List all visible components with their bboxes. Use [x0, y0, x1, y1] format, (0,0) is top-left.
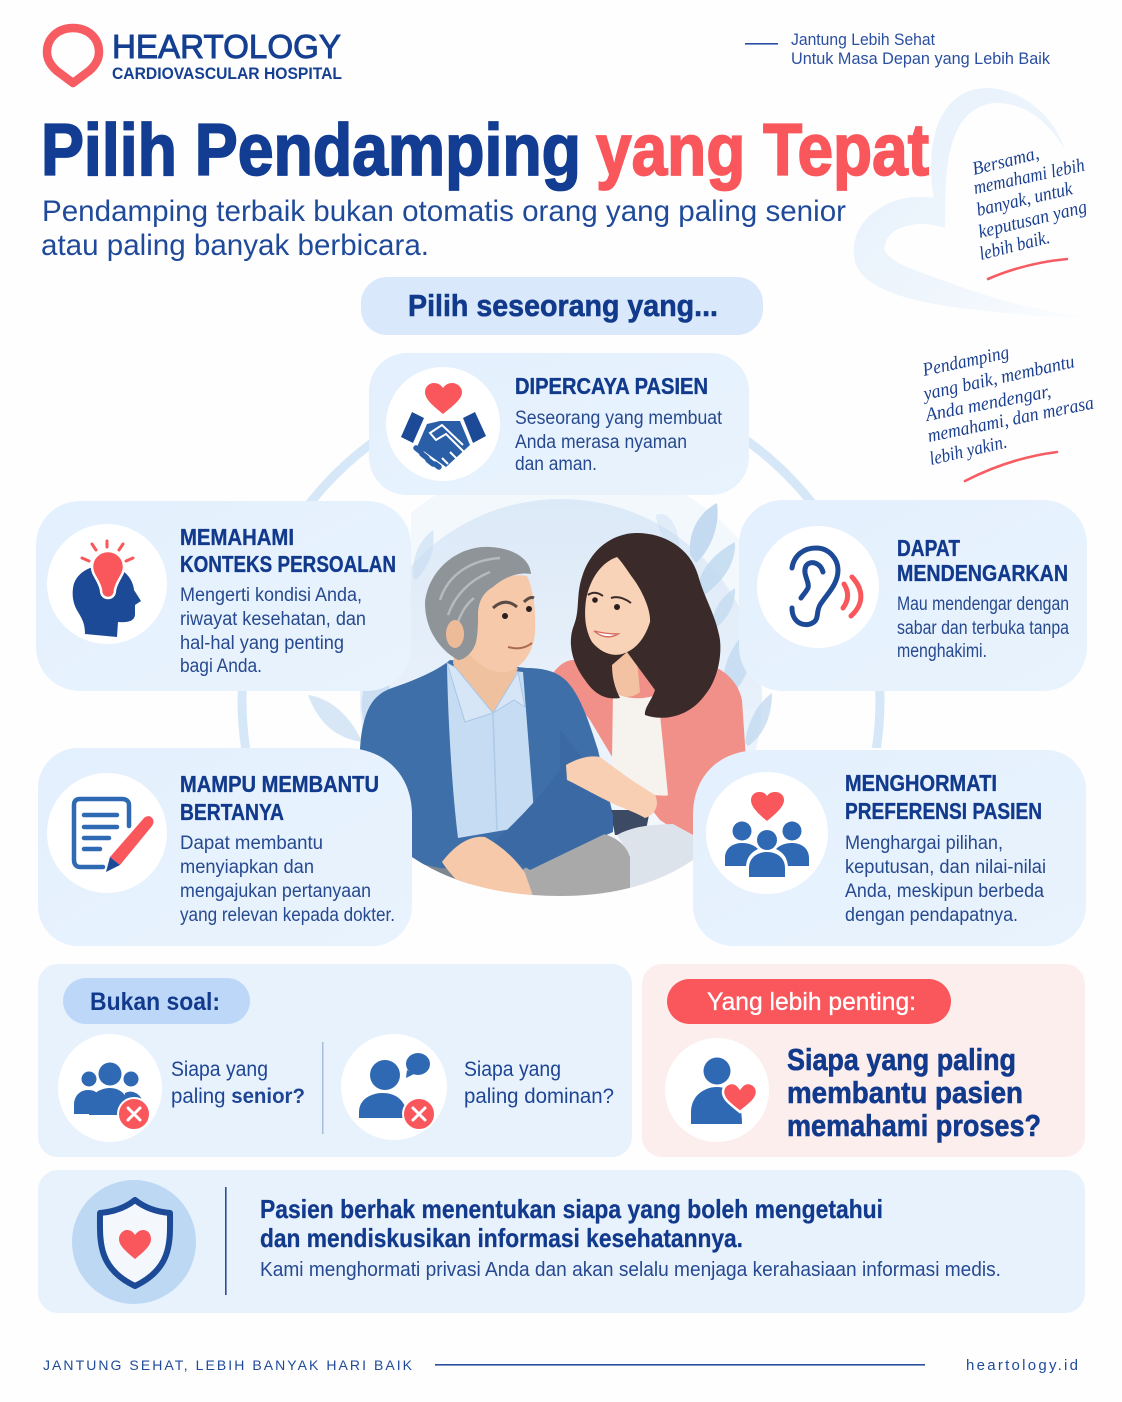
card heading: DIPERCAYA PASIEN [515, 373, 708, 399]
soft halo [411, 495, 739, 606]
man features [493, 598, 534, 648]
icon: head with lightbulb [47, 524, 167, 644]
woman face [585, 557, 650, 655]
card body: sabar dan terbuka tanpa [897, 618, 1069, 639]
handwritten note: pendamping: yang baik, membantu [920, 351, 1076, 405]
card body: mengajukan pertanyaan [180, 881, 371, 902]
card body: yang relevan kepada dokter. [180, 905, 395, 926]
card body: Mengerti kondisi Anda, [180, 585, 362, 606]
man sleeve [507, 802, 613, 870]
card heading: MENDENGARKAN [897, 560, 1068, 586]
card heading: KONTEKS PERSOALAN [180, 551, 396, 577]
handwritten note: pendamping: Pendamping [920, 342, 1011, 381]
man pants [522, 834, 630, 896]
subtitle: Pendamping terbaik bukan otomatis orang yang paling senior [42, 195, 846, 228]
handwritten note: bersama [970, 143, 1089, 279]
text: siapa yang paling dominan [464, 1058, 614, 1108]
card heading: MAMPU MEMBANTU [180, 771, 379, 797]
text: siapa yang paling dominan: Siapa yang [464, 1058, 561, 1081]
man cardigan [350, 660, 613, 870]
handwritten note: bersama: Bersama, [970, 143, 1041, 180]
text: kerahasiaan: Kami menghormati privasi Anda dan akan selalu menjaga kerahasiaan informasi medis. [260, 1258, 1001, 1281]
heading pill [361, 277, 763, 335]
text: hak pasien: Pasien berhak menentukan siapa yang boleh mengetahui [260, 1194, 883, 1224]
card body [180, 585, 366, 677]
handwritten note: pendamping: memahami, dan merasa [926, 393, 1096, 447]
tagline: Jantung Lebih Sehat [791, 31, 935, 49]
card body [180, 833, 395, 926]
man neck [453, 650, 518, 712]
icon: ear with sound waves [757, 526, 879, 648]
pill: bukan soal [63, 978, 250, 1024]
icon: person with heart [665, 1038, 769, 1142]
foliage [308, 503, 772, 746]
card heading: MENGHORMATI [845, 770, 997, 796]
card body: Mau mendengar dengan [897, 594, 1069, 615]
man collar [447, 663, 525, 722]
card body: bagi Anda. [180, 656, 262, 677]
card body: menyiapkan dan [180, 857, 314, 878]
card body: Dapat membantu [180, 833, 323, 854]
text: siapa yang paling membantu: memahami proses? [787, 1108, 1041, 1143]
subtitle: atau paling banyak berbicara. [41, 229, 429, 262]
card heading: DAPAT [897, 535, 960, 561]
woman hair [571, 533, 720, 718]
footer [43, 1357, 1078, 1374]
icon: senior group crossed [58, 1034, 162, 1142]
woman features [588, 593, 631, 637]
icon: document and pencil [47, 773, 167, 893]
handwritten note: pendamping: lebih yakin. [927, 432, 1009, 470]
background ring [238, 437, 884, 748]
card body [845, 833, 1046, 926]
woman hand [566, 756, 657, 818]
text: siapa yang paling membantu [787, 1042, 1041, 1143]
text: siapa yang paling dominan: paling dominan? [464, 1085, 614, 1108]
card: dapat mendengarkan [739, 500, 1087, 691]
illustration: patient and companion [308, 495, 772, 896]
card: memahami konteks [36, 501, 411, 691]
woman neck [612, 652, 640, 697]
card body: Anda, meskipun berbeda [845, 881, 1044, 902]
card body: dan aman. [515, 454, 597, 475]
icon: dominant person crossed [341, 1034, 447, 1140]
pill: yang lebih penting [667, 979, 951, 1024]
man ear [446, 620, 464, 648]
panel: bukan soal [38, 964, 632, 1157]
decorative heart outline [854, 88, 1085, 317]
card body [897, 594, 1069, 662]
woman top [612, 692, 668, 815]
title [41, 110, 929, 191]
woman cardigan [553, 660, 746, 840]
tagline [745, 31, 1051, 68]
woman pants [617, 824, 693, 888]
man hair [425, 547, 531, 660]
handwritten note: bersama: keputusan yang [976, 197, 1089, 243]
handwritten note: bersama: lebih baik. [977, 227, 1052, 265]
card heading: MEMAHAMI [180, 524, 294, 550]
hair highlights [439, 556, 500, 622]
panel: privasi [38, 1170, 1085, 1313]
title: Pilih Pendamping [41, 110, 581, 191]
text: siapa yang paling senior: Siapa yang [171, 1058, 268, 1081]
handwritten note: bersama: memahami lebih [972, 155, 1087, 199]
card body: menghakimi. [897, 641, 987, 662]
card: menghormati preferensi [693, 750, 1086, 946]
panel: yang lebih penting [642, 964, 1085, 1157]
text: siapa yang paling membantu: Siapa yang paling [787, 1042, 1016, 1077]
card heading [897, 535, 1068, 586]
subtitle [41, 195, 846, 262]
card body: keputusan, dan nilai-nilai [845, 857, 1046, 878]
text: siapa yang paling senior: paling senior? [171, 1085, 305, 1108]
woman sleeve [655, 795, 693, 835]
card body: Seseorang yang membuat [515, 408, 723, 429]
pill: yang lebih penting: Yang lebih penting: [707, 988, 916, 1016]
card body: Menghargai pilihan, [845, 833, 1003, 854]
heading pill: Pilih seseorang yang... [408, 288, 718, 323]
handwritten note: pendamping [920, 342, 1096, 481]
man hands [442, 837, 533, 896]
icon: handshake with heart [386, 367, 500, 481]
handwritten note: pendamping: Anda mendengar, [922, 381, 1053, 426]
icon: group with heart [706, 772, 828, 894]
card body: hal-hal yang penting [180, 633, 344, 654]
footer: heartology.id [966, 1357, 1078, 1374]
logo subtitle: CARDIOVASCULAR HOSPITAL [112, 65, 342, 83]
title: yang Tepat [596, 110, 929, 191]
text: hak pasien [260, 1194, 883, 1253]
text: hak pasien: dan mendiskusikan informasi kesehatannya. [260, 1223, 743, 1253]
card body: dengan pendapatnya. [845, 905, 1018, 926]
backdrop circle [360, 499, 762, 844]
card body: riwayat kesehatan, dan [180, 609, 366, 630]
card heading [180, 771, 379, 825]
card heading: BERTANYA [180, 799, 284, 825]
text: siapa yang paling membantu: membantu pasien [787, 1075, 1023, 1110]
tagline: Untuk Masa Depan yang Lebih Baik [791, 50, 1051, 68]
icon: shield with heart [72, 1180, 196, 1304]
card body: Anda merasa nyaman [515, 432, 687, 453]
card: dipercaya pasien [369, 353, 749, 495]
handwritten note: bersama: banyak, untuk [974, 178, 1075, 221]
card heading: PREFERENSI PASIEN [845, 798, 1042, 824]
icon: logo pin [47, 28, 99, 83]
logo name: HEARTOLOGY [112, 28, 341, 65]
man shirt placket [493, 714, 497, 830]
man shirt [447, 665, 535, 838]
woman dark shadow [610, 810, 650, 835]
logo [47, 28, 342, 83]
card heading [180, 524, 396, 577]
pill: bukan soal: Bukan soal: [90, 988, 220, 1016]
footer: JANTUNG SEHAT, LEBIH BANYAK HARI BAIK [43, 1357, 413, 1373]
man face [469, 575, 536, 672]
card heading [845, 770, 1042, 824]
gray trousers back [412, 857, 470, 884]
card body [515, 408, 723, 475]
text: siapa yang paling senior [171, 1058, 305, 1108]
card: mampu membantu bertanya [38, 748, 412, 946]
